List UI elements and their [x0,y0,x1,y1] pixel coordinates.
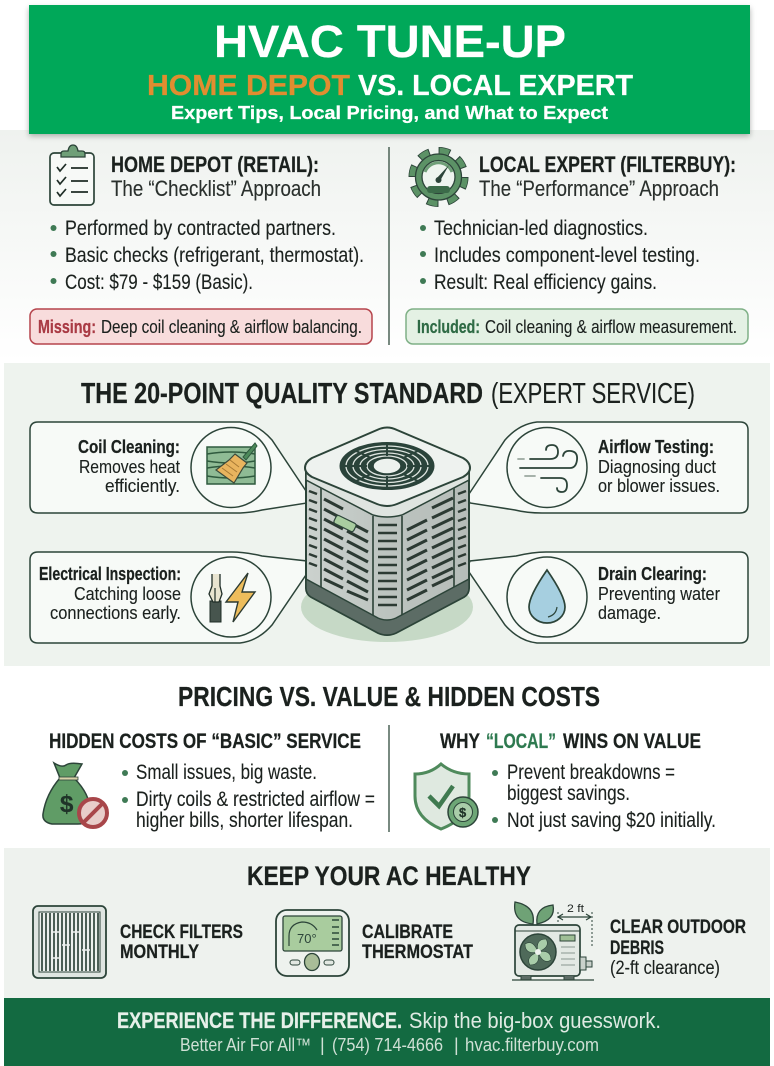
icon: thermostat: 70° [297,931,317,946]
text: clear outdoor debris [610,916,746,979]
icon: shield with check and coin: $ [459,805,467,820]
text: calibrate thermostat [362,921,473,963]
bullets: hidden costs: Small issues, big waste. [136,761,317,784]
text: calibrate thermostat: THERMOSTAT [362,941,473,963]
card: electrical inspection [30,552,310,643]
subtitle: home depot vs local expert: VS. LOCAL EXPERT [358,70,633,102]
icon: clipboard [50,145,94,205]
icon: wires and lightning bolt [209,573,255,622]
callout: missing [30,309,372,344]
callout: missing: Deep coil cleaning & airflow balancing. [101,316,362,337]
footer contact line: Better Air For All™ [180,1035,311,1055]
icon: outdoor unit with plants and 2 ft clearance [512,902,594,980]
icon: money bag with prohibition sign [43,763,107,827]
footer banner [4,998,770,1066]
bullets: home depot: Performed by contracted partners. [65,216,336,240]
panel: local expert filterbuy [406,151,748,344]
illustration: ac condenser unit [301,428,473,642]
nameplate [333,515,357,532]
heading: quality standard: (EXPERT SERVICE) [491,378,695,410]
bullets: why local wins: biggest savings. [507,782,630,805]
bullets: home depot [50,216,364,294]
heading: quality standard: THE 20-POINT QUALITY STANDARD [81,378,483,410]
text: coil cleaning: Coil Cleaning: [78,436,180,457]
subheading: why local wins: WINS ON VALUE [563,730,701,753]
text: calibrate thermostat: CALIBRATE [362,921,453,943]
text: check filters [120,921,243,963]
footer contact line: hvac.filterbuy.com [465,1035,599,1055]
bullets: local expert: Technician-led diagnostics. [434,216,648,240]
text: coil cleaning: efficiently. [105,475,180,496]
card: coil cleaning [30,422,310,513]
bullets: local expert [420,216,700,294]
subheading: why local wins [440,730,701,753]
callout: included: Included: [417,316,480,337]
subheading: why local wins: “LOCAL” [486,730,556,753]
fan grille [340,442,434,490]
bullets: hidden costs: higher bills, shorter lifespan. [136,809,353,832]
footer contact line: | [320,1035,325,1055]
text: airflow testing: Airflow Testing: [598,436,714,457]
unit body [306,468,469,635]
card: airflow testing [467,422,748,513]
icon: performance gear [412,151,464,203]
heading: home depot: The “Checklist” Approach [111,176,321,201]
bullets: why local wins [492,761,716,832]
footer headline [117,1008,661,1033]
bullets: home depot: Basic checks (refrigerant, thermostat). [65,243,364,267]
panel: keep your ac healthy [4,848,770,998]
bullets: why local wins: Prevent breakdowns = [507,761,675,784]
footer contact line: (754) 714-4666 [332,1035,443,1055]
bullets: local expert: Includes component-level testing. [434,243,700,267]
title: HVAC TUNE-UP [214,16,566,67]
footer contact line: | [454,1035,459,1055]
subtitle: home depot vs local expert: HOME DEPOT [147,70,350,102]
text: coil cleaning [78,436,180,496]
icon: money bag with prohibition sign: $ [60,791,74,818]
bullets: hidden costs [122,761,375,832]
heading: pricing vs value: PRICING VS. VALUE & HIDDEN COSTS [178,681,600,712]
icon: coil and brush [207,443,257,484]
heading: local expert: The “Performance” Approach [479,176,719,201]
base [306,579,469,635]
subheading: hidden costs: HIDDEN COSTS OF “BASIC” SERVICE [49,730,361,753]
panel: home depot retail [30,145,372,344]
heading: home depot: HOME DEPOT (RETAIL): [111,152,319,177]
text: drain clearing: Drain Clearing: [598,563,707,584]
bullets: local expert: Result: Real efficiency gains. [434,270,657,294]
text: airflow testing: or blower issues. [598,475,720,496]
panel: comparison background [0,130,774,362]
louvers [309,491,466,605]
subtitle: home depot vs local expert [147,70,633,102]
heading: keep your ac healthy: KEEP YOUR AC HEALTHY [247,861,531,891]
tagline: Expert Tips, Local Pricing, and What to Expect [171,102,608,123]
rim below top plate [306,468,469,517]
footer contact line [180,1035,599,1055]
text: electrical inspection [39,563,181,623]
header banner [29,5,750,136]
text: drain clearing: Preventing water [598,583,720,604]
text: clear outdoor debris: (2-ft clearance) [610,958,720,979]
icon: outdoor unit with plants and 2 ft clearance: 2 ft [567,903,584,915]
footer headline: Skip the big-box guesswork. [409,1008,661,1033]
text: electrical inspection: connections early. [50,602,181,623]
callout: included [406,309,748,344]
text: clear outdoor debris: DEBRIS [610,937,664,959]
subheading: why local wins: WHY [440,730,480,753]
panel: 20-point quality standard [4,363,770,666]
heading: local expert [479,152,736,201]
bullets: home depot: Cost: $79 - $159 (Basic). [65,270,253,294]
text: coil cleaning: Removes heat [79,456,180,477]
text: drain clearing: damage. [598,602,661,623]
panel: pricing vs value [43,681,716,832]
heading: home depot [111,152,321,201]
text: check filters: MONTHLY [120,941,199,963]
text: check filters: CHECK FILTERS [120,921,243,943]
card: drain clearing [467,552,748,643]
top panel [305,428,470,506]
text: electrical inspection: Catching loose [74,583,181,604]
bullets: why local wins: Not just saving $20 initially. [507,809,716,832]
text: drain clearing [598,563,720,623]
icon: water drop [529,570,565,623]
icon: thermostat [276,910,349,976]
icon: air filter [33,906,106,978]
callout: missing: Missing: [38,316,96,337]
icon: airflow [518,445,577,492]
footer headline: EXPERIENCE THE DIFFERENCE. [117,1008,402,1033]
bullets: hidden costs: Dirty coils & restricted airflow = [136,788,375,811]
text: airflow testing [598,436,720,496]
text: electrical inspection: Electrical Inspection: [39,563,181,584]
text: airflow testing: Diagnosing duct [598,456,716,477]
icon: shield with check and coin [415,764,478,829]
